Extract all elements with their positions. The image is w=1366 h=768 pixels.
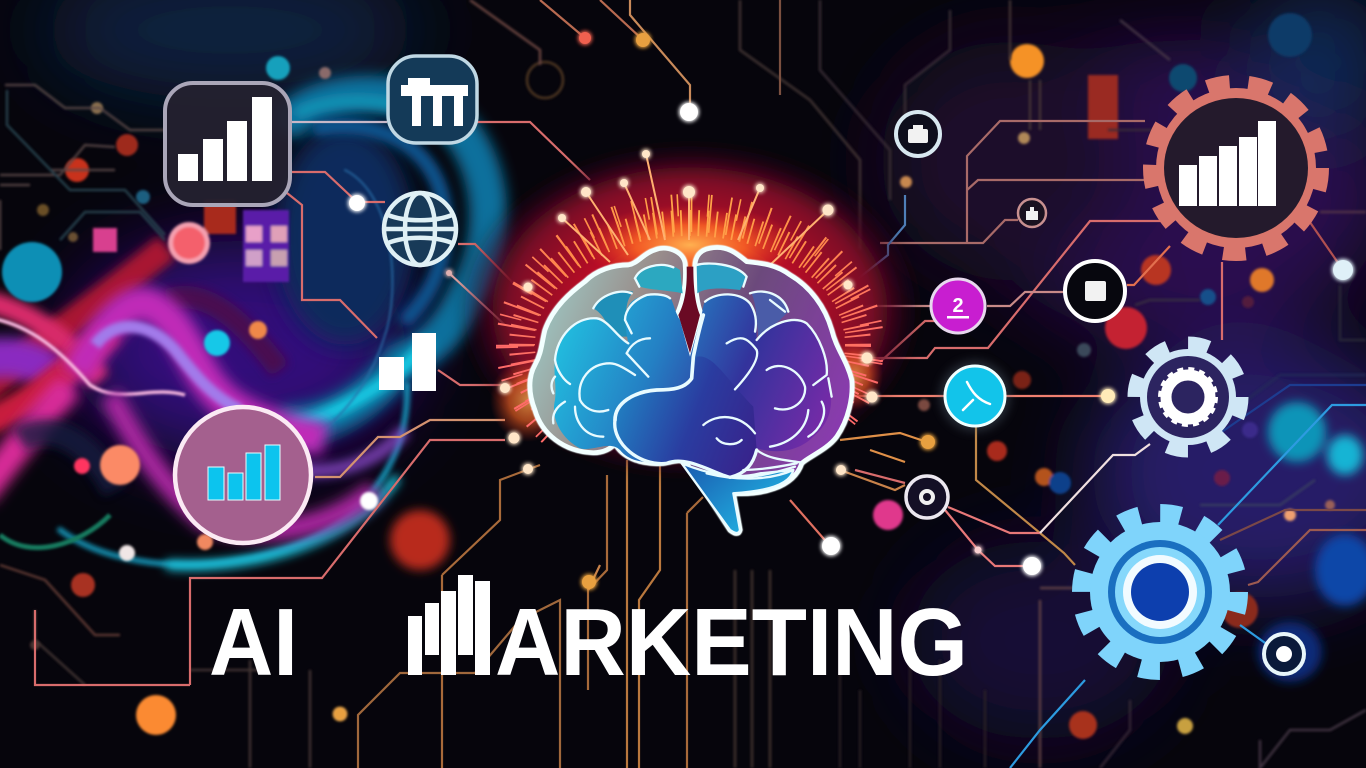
radiating rays [507, 205, 873, 485]
title word: AI: AI [209, 589, 298, 696]
brain core lobe [615, 356, 757, 477]
icon: pillars rounded square [388, 56, 477, 143]
circuit traces blue [850, 195, 1366, 768]
gear: pale blue settings [1135, 344, 1241, 450]
orange glow left of brain [490, 358, 566, 442]
gear: coral with bar chart [1153, 85, 1319, 251]
large red bokeh [390, 510, 450, 570]
orange glow above brain [580, 205, 800, 285]
icon: cyan phone badge [940, 361, 1010, 431]
title bar-chart letter M [408, 575, 490, 675]
brain silhouette [530, 248, 852, 533]
icon: magenta number badge [931, 279, 985, 333]
bokeh lights right [873, 13, 1335, 739]
brain lobes [554, 264, 831, 477]
brain fold lines [552, 264, 832, 479]
ray tip nodes [500, 150, 878, 475]
icon: plain two bars [379, 333, 436, 391]
white junction dots [335, 32, 1353, 719]
magenta waves [0, 247, 405, 548]
icon: bottom right ring [1264, 634, 1304, 674]
navy swirl centre [275, 125, 415, 345]
gear: sky blue large [1084, 516, 1236, 668]
red glow behind brain [455, 140, 925, 480]
title [209, 575, 968, 696]
brain tail [682, 463, 793, 533]
icon: small bag circle [1018, 199, 1046, 227]
icon: globe [384, 193, 456, 265]
icon: small lock circle [896, 112, 940, 156]
brain [530, 248, 852, 533]
icon: small target badge [906, 476, 948, 518]
icon: magenta number badge: 2 [952, 295, 964, 317]
circuit traces top and bottom orange [358, 0, 927, 768]
icon: bars in circle [175, 407, 311, 543]
title word: ARKETING: ARKETING [495, 589, 968, 696]
orange glow right of brain [827, 340, 883, 410]
icon: black square badge [1065, 261, 1125, 321]
ray lines to tip nodes [562, 154, 828, 265]
icon: bar chart rounded square [165, 83, 290, 205]
circuit traces coral [35, 121, 1366, 685]
blue and teal bokeh [1258, 402, 1366, 682]
brain centre gap [678, 267, 700, 353]
bokeh lights left [2, 56, 378, 735]
cyan swirl [60, 95, 488, 566]
